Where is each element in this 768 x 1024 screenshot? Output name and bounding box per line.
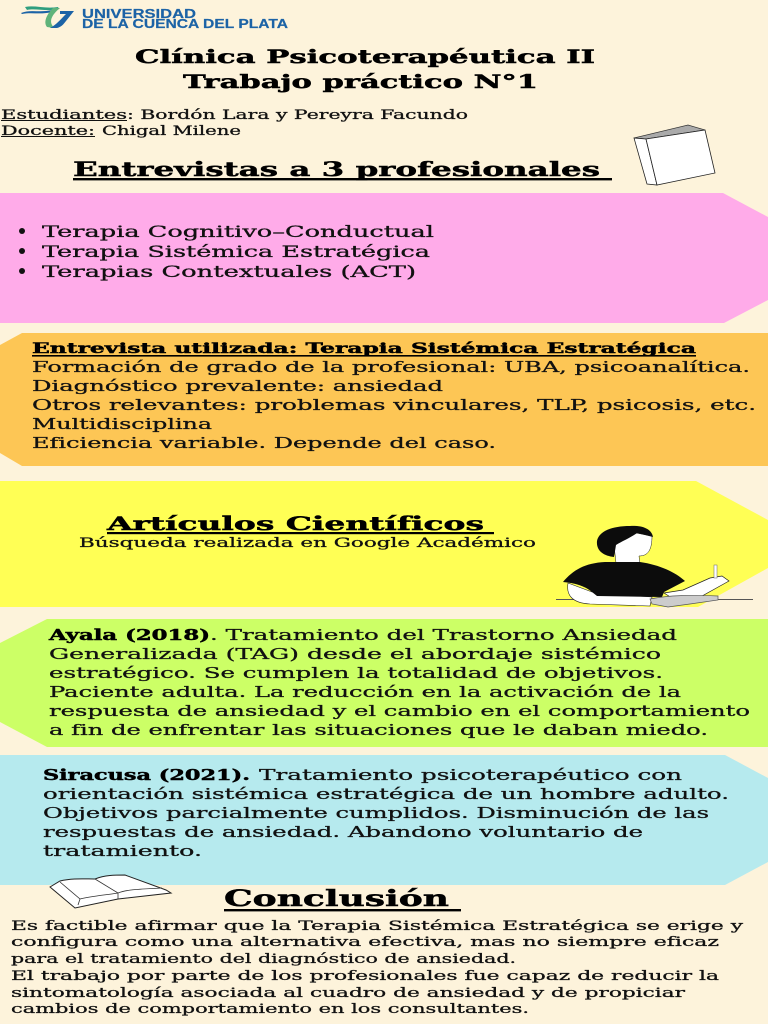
students and teacher xyxy=(1,108,468,139)
therapy list: Terapia Cognitivo–Conductual xyxy=(42,223,434,241)
heading: interviews: Entrevistas a 3 profesionales xyxy=(73,157,600,181)
search note: Búsqueda realizada en Google Académico xyxy=(79,536,536,551)
left arm xyxy=(568,583,652,606)
logo: Universidad de la Cuenca del Plata: UNIVERSIDAD xyxy=(82,7,196,21)
conclusion text: El trabajo por parte de los profesionales fue capaz de reducir la xyxy=(11,969,719,984)
logo: Universidad de la Cuenca del Plata xyxy=(21,6,288,31)
conclusion text: sintomatología asociada al cuadro de ansiedad y de propiciar xyxy=(11,986,686,1001)
Siracusa summary: Objetivos parcialmente cumplidos. Disminución de las xyxy=(43,806,709,822)
Siracusa summary: orientación sistémica estratégica de un hombre adulto. xyxy=(43,787,729,803)
therapy list: Terapia Sistémica Estratégica xyxy=(42,243,430,261)
Ayala summary: Paciente adulta. La reducción en la activación de la xyxy=(49,685,682,701)
title: Clínica Psicoterapéutica II xyxy=(135,47,595,68)
hair xyxy=(597,526,653,557)
therapy list xyxy=(19,223,434,281)
Ayala summary: estratégico. Se cumplen la totalidad de objetivos. xyxy=(49,666,663,682)
students and teacher: : Bordón Lara y Pereyra Facundo xyxy=(127,108,468,123)
interview details: Eficiencia variable. Depende del caso. xyxy=(32,436,496,452)
Ayala summary: a fin de enfrentar las situaciones que le daban miedo. xyxy=(49,723,708,739)
icon: open book xyxy=(50,875,171,908)
interview details: Multidisciplina xyxy=(32,417,213,433)
Ayala summary: Generalizada (TAG) desde el abordaje sistémico xyxy=(49,647,661,663)
shirt xyxy=(563,562,685,597)
title: Trabajo práctico N°1 xyxy=(183,72,538,93)
right arm and raised hand xyxy=(664,576,729,598)
students and teacher: Chigal Milene xyxy=(102,124,241,139)
neck and face xyxy=(614,533,652,564)
interview details: Formación de grado de la profesional: UBA, psicoanalítica. xyxy=(32,360,750,376)
icon: closed book xyxy=(634,125,715,185)
students and teacher: Estudiantes xyxy=(1,108,127,123)
title xyxy=(135,47,595,93)
Siracusa summary: Siracusa (2021). xyxy=(43,767,250,784)
heading: conclusion: Conclusión xyxy=(224,886,449,912)
panel: therapies xyxy=(0,193,768,323)
heading: scientific articles: Artículos Científicos xyxy=(105,513,484,535)
Ayala summary: respuesta de ansiedad y el cambio en el comportamiento xyxy=(49,704,750,720)
logo: Universidad de la Cuenca del Plata: DE LA CUENCA DEL PLATA xyxy=(82,17,288,31)
panel: Siracusa 2021 xyxy=(0,755,768,885)
Siracusa summary: Tratamiento psicoterapéutico con xyxy=(259,768,682,784)
interview details: Diagnóstico prevalente: ansiedad xyxy=(32,379,443,395)
panel: interview used xyxy=(0,333,768,466)
Ayala summary: . Tratamiento del Trastorno Ansiedad xyxy=(210,628,677,644)
interview details: Otros relevantes: problemas vinculares, TLP, psicosis, etc. xyxy=(32,398,756,414)
Ayala summary xyxy=(47,627,750,739)
illustration: person writing xyxy=(556,526,753,607)
fingers xyxy=(650,595,718,607)
conclusion text: Es factible afirmar que la Terapia Sistémica Estratégica se erige y xyxy=(11,919,744,934)
therapy list: Terapias Contextuales (ACT) xyxy=(42,263,416,281)
interview details: Entrevista utilizada: Terapia Sistémica Estratégica xyxy=(32,341,696,357)
panel: Ayala 2018 xyxy=(0,619,768,747)
conclusion text: configura como una alternativa efectiva, mas no siempre eficaz xyxy=(11,935,719,950)
Siracusa summary: respuestas de ansiedad. Abandono voluntario de xyxy=(43,825,643,841)
Siracusa summary: tratamiento. xyxy=(43,844,202,860)
Ayala summary: Ayala (2018) xyxy=(47,627,210,644)
conclusion text xyxy=(11,919,744,1017)
conclusion text: cambios de comportamiento en los consultantes. xyxy=(11,1002,529,1017)
students and teacher: Docente: xyxy=(1,124,95,139)
panel: scientific articles xyxy=(0,481,768,607)
conclusion text: para el tratamiento del diagnóstico de ansiedad. xyxy=(11,952,516,967)
interview details xyxy=(32,341,756,452)
Siracusa summary xyxy=(43,767,729,860)
pencil xyxy=(714,565,717,578)
